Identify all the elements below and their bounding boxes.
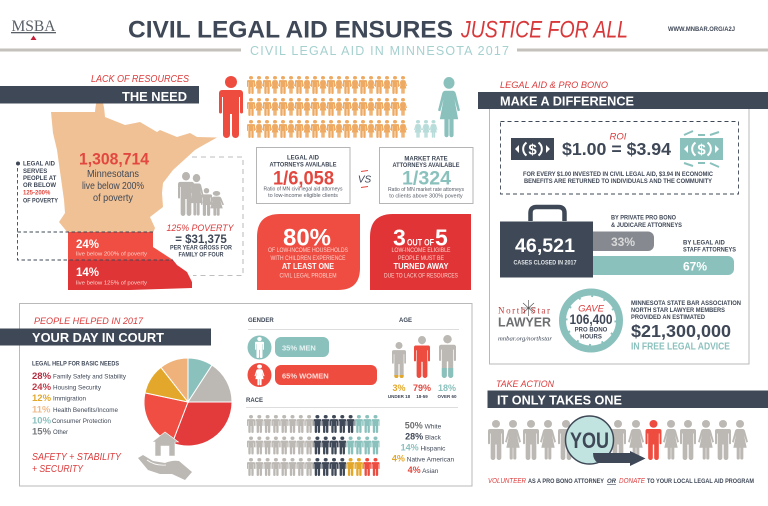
legend: basic needs: LEGAL HELP FOR BASIC NEEDS: [32, 361, 119, 367]
stat: 14 percent: live below 125% of poverty: [76, 280, 147, 286]
legend: basic needs: 10%: [32, 416, 52, 426]
chart: gender: [248, 318, 459, 387]
chart: gender: GENDER: [248, 318, 274, 324]
stat box: legal aid attorneys: [256, 148, 350, 204]
call to action: AS A PRO BONO ATTORNEY: [528, 479, 604, 485]
stat box: market rate attorneys: to clients above 300% poverty: [389, 193, 463, 199]
card: 3 out of 5: LOW-INCOME ELIGIBLE: [392, 248, 450, 254]
card: 80 percent: AT LEAST ONE: [282, 261, 334, 271]
icon: dark bill: [511, 138, 554, 160]
icon: you circle: YOU: [570, 428, 609, 453]
badge: 106,400 pro bono hours: HOURS: [580, 334, 602, 340]
slogan: safety stability security: + SECURITY: [32, 463, 84, 475]
call to action: OR: [607, 479, 617, 485]
stat box: legal aid attorneys: 1/6,058: [273, 168, 334, 190]
callout: legal aid serves people: OF POVERTY: [23, 198, 58, 204]
figure: under 18: [388, 342, 411, 399]
card: 3 out of 5: OUT OF: [407, 238, 434, 248]
stat box: market rate attorneys: Ratio of MN market rate attorneys: [388, 187, 464, 193]
legend: race: 4% Native American: [392, 454, 454, 464]
stat: 24 percent: 24%: [76, 239, 99, 251]
card: 80 percent: 80%: [283, 224, 331, 252]
stat: free legal advice: MINNESOTA STATE BAR ASSOCIATION: [631, 301, 741, 307]
bar: women: 65% WOMEN: [282, 372, 329, 380]
heading: take action: TAKE ACTION: [496, 379, 554, 390]
legend: basic needs: 28%: [32, 371, 52, 382]
stat: free legal advice: [631, 301, 741, 352]
icon: family: [178, 172, 224, 216]
card: 80 percent: OF LOW-INCOME HOUSEHOLDS: [268, 248, 348, 254]
figure: under 18: 3%: [392, 383, 406, 393]
slogan: safety stability security: [32, 451, 122, 475]
callout: return on investment: $1.00 = $3.94: [562, 139, 671, 159]
chart: age: [388, 318, 457, 399]
icon: you circle: [566, 416, 614, 464]
callout: return on investment: FOR EVERY $1.00 INVESTED IN CIVIL LEGAL AID, $3.94 IN ECONOMIC: [523, 172, 714, 178]
pie chart: [144, 358, 232, 446]
title: CIVIL LEGAL AID ENSURES: [128, 16, 453, 44]
panel frame: [490, 105, 749, 364]
card: 3 out of 5: [370, 214, 471, 290]
card: 3 out of 5: DUE TO LACK OF RESOURCES: [384, 274, 458, 280]
title: JUSTICE FOR ALL: [460, 16, 628, 44]
badge: 106,400 pro bono hours: [562, 292, 620, 349]
pictogram rows: [247, 415, 380, 476]
subtitle with rule: CIVIL LEGAL AID IN MINNESOTA 2017: [250, 44, 509, 58]
stat box: legal aid attorneys: to low-income eligible clients: [268, 193, 338, 199]
logo: North Star Lawyer: [498, 300, 552, 342]
banner: your day in court: YOUR DAY IN COURT: [32, 331, 164, 345]
stat: free legal advice: $21,300,000: [631, 321, 731, 341]
stat: 24 percent: [76, 239, 147, 258]
bar chart: cases closed: [500, 207, 736, 278]
bar: women: [248, 363, 377, 387]
legend: basic needs: Consumer Protection: [52, 418, 112, 425]
banner: the need: [0, 86, 199, 104]
label: versus: VS: [358, 174, 371, 186]
call to action: TO YOUR LOCAL LEGAL AID PROGRAM: [647, 479, 754, 485]
stat: free legal advice: PROVIDED AN ESTIMATED: [631, 315, 706, 321]
panel: the need: [0, 74, 473, 290]
figure: 18 to 59: [413, 336, 431, 399]
map: Minnesota: [51, 99, 217, 290]
slogan: safety stability security: SAFETY + STABILITY: [32, 451, 122, 463]
stat: free legal advice: IN FREE LEGAL ADVICE: [631, 342, 730, 352]
logo: North Star Lawyer: North Star: [498, 306, 550, 316]
legend: basic needs: 11%: [32, 404, 51, 416]
bar: 33 percent: [590, 232, 654, 251]
bar: 33 percent: 33%: [611, 235, 635, 249]
panel: make a difference: [478, 80, 768, 364]
stat box: market rate attorneys: [380, 148, 473, 204]
stat: 14 percent: [76, 267, 147, 286]
card: 80 percent: [257, 214, 360, 290]
stat: 1,308,714 Minnesotans: live below 200%: [82, 181, 144, 192]
callout: family of four poverty: [166, 157, 243, 276]
callout: return on investment: ROI: [610, 132, 627, 142]
pictogram: row of people: [488, 420, 748, 460]
card: 80 percent: CIVIL LEGAL PROBLEM: [280, 274, 336, 280]
stat: free legal advice: NORTH STAR LAWYER MEMBERS: [631, 308, 725, 314]
banner: make a difference: MAKE A DIFFERENCE: [500, 94, 634, 108]
logo: North Star Lawyer: mnbar.org/northstar: [498, 336, 552, 342]
icon: dark bill: $: [528, 142, 537, 158]
legend: basic needs: Immigration: [53, 396, 87, 402]
label: private attorneys: [611, 216, 682, 229]
logo: MSBA: MSBA: [12, 18, 56, 35]
callout: return on investment: BENEFITS ARE RETURNED TO INDIVIDUALS AND THE COMMUNITY: [524, 179, 712, 185]
icon: red man: [219, 76, 243, 138]
banner: it only takes one: [488, 390, 768, 408]
legend: basic needs: [32, 361, 127, 438]
figure: 18 to 59: 79%: [413, 383, 431, 393]
website url: WWW.MNBAR.ORG/A2J: [668, 27, 735, 33]
callout: family of four poverty: FAMILY OF FOUR: [178, 252, 224, 258]
card: 3 out of 5: PEOPLE MUST BE: [398, 256, 444, 262]
chart: race pictogram: RACE: [246, 398, 263, 404]
label: private attorneys: BY PRIVATE PRO BONO: [611, 216, 676, 222]
figure: 18 to 59: 18-59: [416, 394, 428, 399]
figure: over 60: OVER 60: [437, 394, 457, 399]
stat box: market rate attorneys: ATTORNEYS AVAILABLE: [392, 163, 460, 169]
legend: basic needs: Family Safety and Stability: [53, 374, 127, 380]
bar: men: [248, 336, 329, 360]
panel frame: [20, 304, 472, 486]
callout: legal aid serves people: LEGAL AID: [23, 162, 56, 168]
legend: basic needs: 24%: [32, 382, 52, 393]
call to action: VOLUNTEER: [488, 476, 526, 485]
card: 80 percent: WITH CHILDREN EXPERIENCE: [270, 256, 346, 262]
label: private attorneys: & JUDICARE ATTORNEYS: [611, 223, 682, 229]
banner: the need: THE NEED: [122, 90, 187, 104]
call to action: DONATE: [619, 476, 646, 485]
callout: return on investment: [500, 122, 738, 194]
callout: legal aid serves people: SERVES: [23, 169, 47, 175]
stat: 14 percent: 14%: [76, 267, 99, 279]
bar: 67 percent: [590, 256, 734, 275]
badge: 106,400 pro bono hours: GAVE: [578, 304, 605, 314]
bar: 67 percent: 67%: [683, 260, 707, 274]
card: 3 out of 5: 5: [435, 224, 448, 250]
stat box: legal aid attorneys: Ratio of MN civil legal aid attorneys: [264, 186, 343, 192]
legend: race: 50% White: [405, 420, 442, 430]
chart: age: AGE: [399, 318, 412, 324]
banner: it only takes one: IT ONLY TAKES ONE: [497, 394, 622, 408]
icon: teal women: [414, 77, 460, 138]
bar: men: 35% MEN: [282, 344, 316, 352]
figure: under 18: UNDER 18: [388, 394, 411, 399]
icon: house in hand: [138, 432, 192, 480]
stat box: market rate attorneys: MARKET RATE: [404, 156, 448, 162]
banner: make a difference: [478, 92, 768, 109]
callout: legal aid serves people: 125-200%: [23, 190, 51, 196]
stat box: market rate attorneys: 1/324: [402, 168, 451, 190]
callout: legal aid serves people: OR BELOW: [23, 183, 56, 189]
figure: over 60: 18%: [438, 383, 456, 393]
icon: teal bill: $: [697, 142, 706, 158]
legend: race: 4% Asian: [408, 465, 439, 475]
legend: basic needs: Other: [53, 429, 68, 436]
legend: basic needs: Health Benefits/Income: [53, 407, 119, 414]
call to action: [488, 476, 754, 485]
heading: legal aid and pro bono: LEGAL AID & PRO BONO: [500, 80, 609, 91]
figure: over 60: [437, 335, 457, 399]
banner: your day in court: [0, 328, 211, 346]
stat: 1,308,714 Minnesotans: of poverty: [93, 193, 133, 204]
card: 3 out of 5: TURNED AWAY: [394, 261, 449, 271]
callout: legal aid serves people: PEOPLE AT: [23, 176, 57, 182]
icon: briefcase with total: 46,521: [515, 236, 575, 257]
heading: people helped: PEOPLE HELPED IN 2017: [34, 316, 144, 327]
label: staff attorneys: STAFF ATTORNEYS: [683, 248, 736, 254]
card: 3 out of 5: 3: [393, 224, 406, 250]
legend: race: 28% Black: [405, 432, 442, 442]
stat: 1,308,714 Minnesotans: Minnesotans: [87, 169, 139, 180]
icon: briefcase with total: CASES CLOSED IN 2017: [514, 260, 577, 266]
pictogram: people rows: [247, 76, 407, 138]
legend: basic needs: 12%: [32, 393, 52, 404]
logo: North Star Lawyer: LAWYER: [498, 314, 552, 330]
label: versus: [358, 170, 371, 188]
callout: family of four poverty: = $31,375: [175, 234, 227, 246]
legend: race: 14% Hispanic: [401, 442, 446, 452]
badge: 106,400 pro bono hours: PRO BONO: [575, 328, 608, 334]
arrow: [593, 451, 646, 466]
icon: teal bill: [680, 131, 723, 167]
label: staff attorneys: BY LEGAL AID: [683, 240, 726, 246]
chart: race pictogram: [246, 398, 458, 476]
stat: 1,308,714 Minnesotans: 1,308,714: [79, 150, 150, 168]
title: [128, 16, 628, 44]
callout: legal aid serves people: [16, 162, 173, 260]
legend: basic needs: 15%: [32, 426, 52, 438]
stat: 1,308,714 Minnesotans: [79, 150, 150, 204]
callout: family of four poverty: PER YEAR GROSS FOR: [170, 246, 233, 252]
heading: lack of resources: LACK OF RESOURCES: [91, 74, 189, 85]
panel: it only takes one: [488, 379, 768, 485]
panel: your day in court: [0, 304, 472, 486]
subtitle with rule: [0, 44, 768, 58]
legend: basic needs: Housing Security: [53, 384, 102, 392]
label: staff attorneys: [683, 240, 736, 254]
legend: race: [392, 420, 454, 475]
badge: 106,400 pro bono hours: 106,400: [570, 311, 613, 327]
stat: 24 percent: live below 200% of poverty: [76, 252, 147, 258]
callout: family of four poverty: 125% POVERTY: [166, 223, 234, 234]
stat box: legal aid attorneys: LEGAL AID: [287, 156, 320, 162]
stat box: legal aid attorneys: ATTORNEYS AVAILABLE: [270, 162, 336, 168]
icon: briefcase with total: [500, 207, 593, 278]
